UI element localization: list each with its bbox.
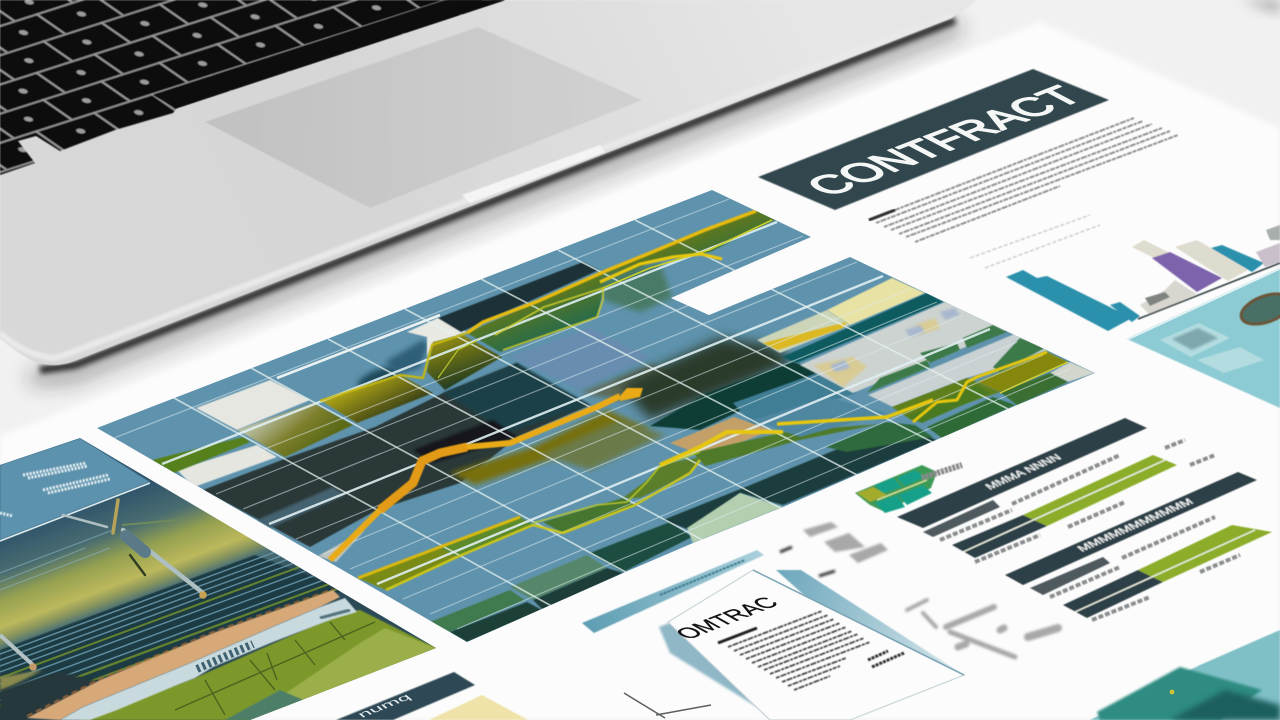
- paragraph lead-in: [869, 210, 895, 220]
- folder fold: [753, 570, 964, 675]
- small beige bar: [1140, 280, 1197, 315]
- heading bar one: [897, 418, 1147, 528]
- right long yellow line: [777, 400, 933, 424]
- green row right: [826, 422, 933, 452]
- document signature marks: [868, 651, 904, 667]
- main line chart panel: [90, 180, 1100, 650]
- laptop: [0, 0, 1280, 378]
- value bar dark one: [952, 515, 1047, 558]
- document body: [728, 611, 870, 690]
- sub bar two: [1030, 557, 1110, 595]
- column grid lines: [174, 220, 1016, 609]
- white fabric: [60, 598, 357, 720]
- lower teal green row: [510, 555, 607, 600]
- qr code marks: [1172, 328, 1218, 350]
- orange line thick section: [380, 447, 467, 510]
- green field: [80, 610, 440, 720]
- grey wind icon group: [907, 600, 1058, 657]
- upper curve line: [600, 254, 722, 282]
- green upper band: [467, 210, 775, 352]
- dark olive blur: [620, 338, 795, 420]
- blue bar small: [1110, 302, 1140, 322]
- qr block: [1160, 323, 1230, 357]
- dark hump: [385, 340, 428, 374]
- heading bar one label: MMMA NNNN: [982, 452, 1064, 492]
- wind turbine two: [0, 635, 37, 671]
- dark green row: [650, 362, 820, 430]
- orange line end marker: [620, 388, 643, 401]
- info block text: [0, 463, 110, 516]
- laptop front lip: [0, 15, 950, 358]
- mid green-yellow line: [533, 452, 700, 523]
- olive right row: [977, 352, 1068, 392]
- lower blue row: [753, 397, 887, 437]
- blue bar two: [1211, 245, 1264, 272]
- document heading: OMTRAC: [669, 593, 785, 643]
- purple bar: [1152, 252, 1222, 292]
- map area: [800, 302, 1007, 393]
- teal field block: [225, 690, 308, 720]
- right thin yellow line: [1000, 362, 1068, 393]
- green row lower right: [907, 385, 990, 423]
- white block one: [196, 380, 310, 430]
- blue bar long: [1006, 270, 1132, 331]
- chart clipped area: [90, 180, 1100, 650]
- dark green lower right: [927, 397, 1015, 438]
- dark ground: [0, 672, 100, 720]
- contract title banner: [758, 69, 1109, 210]
- dark teal shade: [443, 363, 590, 433]
- band segment two: [440, 517, 533, 557]
- field fences: [175, 622, 375, 715]
- upper thin line one: [495, 288, 603, 350]
- wind turbine one: [63, 500, 207, 599]
- bottom header tab: [336, 672, 475, 720]
- olive band: [237, 403, 353, 457]
- beach: [27, 590, 340, 720]
- faint caption: [970, 215, 1100, 268]
- heading bar two label: MMMMMMMMMMM: [1074, 496, 1196, 554]
- laptop wide shadow: [30, 26, 960, 378]
- row grid lines: [114, 199, 1070, 629]
- grey-blue patch: [257, 487, 345, 528]
- dark top stripe: [438, 262, 599, 332]
- upper yellow line: [467, 211, 756, 333]
- grey sliver: [318, 530, 365, 562]
- shore tan band: [0, 670, 43, 692]
- green wedge under yellow: [693, 424, 880, 466]
- header tab label: numq: [354, 692, 414, 720]
- lower yellow bottom line: [386, 460, 700, 590]
- top info block: [0, 438, 150, 540]
- beige bar top: [1132, 240, 1170, 258]
- grey legend blocks: [780, 522, 888, 576]
- dark central block: [203, 363, 590, 547]
- green icon tile: [855, 465, 937, 513]
- paper page: [668, 570, 964, 720]
- orange main line: [330, 396, 620, 560]
- panel: teal card: [1127, 268, 1280, 408]
- map row two: [868, 333, 1047, 407]
- band segment four: [623, 457, 700, 498]
- dark green row mid: [590, 522, 692, 572]
- header strip text: [660, 560, 745, 595]
- yellow olive ridge: [320, 375, 433, 423]
- teal dark field: [1097, 667, 1262, 720]
- olive hump: [427, 335, 502, 390]
- dark teal corner: [1170, 690, 1280, 720]
- folder back: [776, 570, 964, 690]
- tan map patch: [670, 416, 770, 452]
- green block right: [1000, 373, 1068, 405]
- bar chart top right: [1006, 225, 1280, 331]
- upper thin line two: [603, 220, 772, 288]
- divider line two: [1075, 530, 1255, 612]
- yellow blob: [763, 322, 847, 350]
- white block two: [177, 445, 277, 487]
- bottom right teal image: [1090, 630, 1280, 720]
- fabric shade: [320, 610, 350, 618]
- stamp: [1237, 288, 1280, 330]
- white triangle: [407, 317, 467, 357]
- lower dark row mid: [533, 568, 623, 610]
- map green patches: [867, 325, 1045, 393]
- mauve bar: [1256, 243, 1280, 267]
- document illustration: [582, 550, 964, 720]
- grey bar top right: [1266, 225, 1280, 240]
- heading bar two: [1005, 472, 1257, 585]
- trackpad: [205, 27, 642, 208]
- cream tab: [429, 695, 528, 720]
- value bar dark two: [1063, 570, 1163, 618]
- bar two notes: [1050, 517, 1240, 620]
- light field: [280, 628, 436, 703]
- value bar green two: [1138, 525, 1272, 582]
- sky: [0, 430, 440, 720]
- left green stripe: [152, 437, 250, 473]
- laptop body: [0, 0, 978, 365]
- lower green row left: [430, 590, 525, 632]
- grey olive fade: [580, 365, 680, 400]
- bar one notes: [940, 440, 1215, 562]
- info block border: [0, 483, 150, 541]
- speckled bar: [1145, 292, 1170, 306]
- dark row right: [663, 427, 936, 530]
- sea base: [0, 555, 345, 720]
- top right laptop shadow: [1240, 0, 1280, 14]
- contract body paragraph: [869, 118, 1178, 242]
- icon caption: [922, 465, 962, 478]
- beach dark edge: [27, 589, 333, 716]
- dark blotch: [354, 364, 400, 386]
- hump line: [320, 333, 467, 401]
- pale green bump: [687, 493, 783, 543]
- lower label: [1197, 347, 1264, 373]
- fabric stripes: [197, 644, 253, 669]
- teal card lighter top edge: [1127, 268, 1280, 339]
- beige bar: [1175, 240, 1248, 281]
- right yellow jag line: [913, 352, 1047, 422]
- blue header strip: [582, 550, 764, 633]
- sub bar one: [923, 500, 1000, 537]
- divider line one: [963, 460, 1165, 552]
- sea green stripes: [0, 552, 340, 706]
- chart axis: [1138, 263, 1280, 319]
- band segment three: [543, 498, 635, 533]
- chart blue base: [90, 180, 1100, 650]
- light tip: [1050, 362, 1095, 382]
- value bar green one: [1023, 455, 1177, 526]
- panel: wind farm scene: [0, 430, 440, 720]
- folder left shade: [659, 622, 770, 718]
- upper right teal: [603, 262, 672, 312]
- tan strand yellow line: [660, 432, 783, 465]
- lower yellow top line: [358, 517, 520, 578]
- near black band: [413, 420, 517, 463]
- turbine line icon: [624, 693, 711, 718]
- hump thin line: [438, 340, 478, 378]
- map beige patches: [813, 318, 940, 387]
- upper right white gap: [671, 237, 850, 315]
- sea blue stripes: [0, 528, 340, 700]
- olive green lower row: [892, 378, 1000, 421]
- laptop notch: [462, 145, 605, 203]
- grey left cream: [757, 310, 850, 353]
- document subhead: [718, 628, 757, 643]
- sky thin lines: [0, 530, 113, 590]
- legend small marks: [780, 547, 835, 576]
- space bar: [153, 0, 505, 108]
- banner title: CONTFRACT: [795, 81, 1094, 202]
- panel: comparison bars: [855, 418, 1272, 620]
- cream row: [827, 278, 925, 325]
- mid blue row: [733, 372, 857, 425]
- olive green fade: [540, 420, 665, 470]
- map blue patches: [830, 308, 960, 372]
- band segment one: [358, 547, 457, 590]
- lower dark row left: [450, 602, 542, 642]
- keyboard: [0, 0, 505, 175]
- yellow accent: [1170, 690, 1174, 694]
- laptop contact shadow: [40, 20, 955, 370]
- lilac blue block: [510, 328, 650, 390]
- dark teal stripe: [782, 293, 943, 363]
- olive under orange line: [450, 410, 650, 485]
